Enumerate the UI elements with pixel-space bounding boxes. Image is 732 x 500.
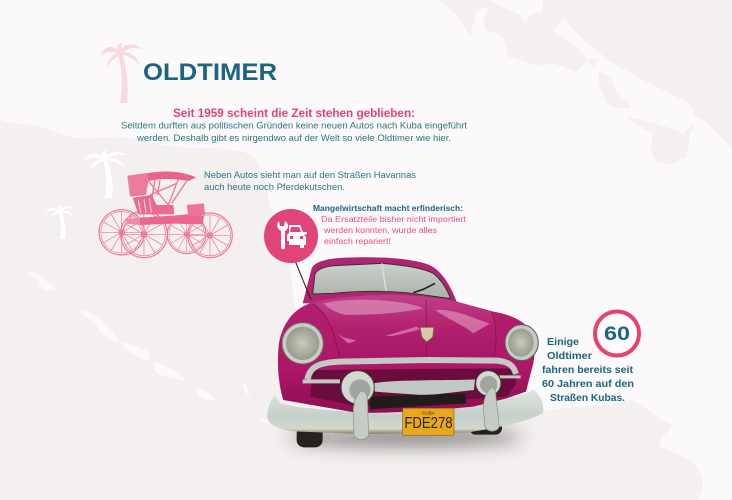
badge: 60 years	[595, 312, 639, 356]
carriage wheels	[99, 210, 232, 258]
hood centre line	[312, 300, 496, 357]
badge: 60 years: 60	[604, 324, 630, 345]
car body	[278, 302, 537, 413]
carriage line 1: Neben Autos sieht man auf den Straßen Havannas	[204, 170, 416, 181]
map: land on the left and bottom	[0, 120, 702, 500]
grille cavity	[310, 368, 517, 407]
emblem	[420, 327, 434, 342]
mainland north east	[542, 0, 732, 148]
licence plate	[403, 408, 454, 435]
mainland west	[439, 0, 598, 72]
island south east	[627, 117, 697, 165]
carriage body and footboard	[140, 214, 204, 225]
repair line 3: einfach repariert!	[324, 236, 391, 246]
icon: pink palm tree behind the title	[100, 42, 142, 103]
licence plate: CUBA	[422, 411, 436, 416]
dark grille slot	[370, 393, 467, 409]
grille upper chrome bar	[307, 360, 516, 379]
intro line 2: werden. Deshalb gibt es nirgendwo auf der Welt so viele Oldtimer wie hier.	[136, 133, 451, 144]
windshield centre bar	[382, 263, 386, 291]
intro heading: Seit 1959 scheint die Zeit stehen geblieben:	[173, 108, 415, 120]
line: fahren bereits seit: fahren bereits seit	[542, 365, 634, 376]
line: 60 Jahren auf den: 60 Jahren auf den	[542, 379, 634, 390]
repair line 2: werden konnten, wurde alles	[323, 225, 437, 235]
title: OLDTIMER	[143, 59, 277, 86]
carriage line 2: auch heute noch Pferdekutschen.	[204, 182, 345, 193]
map: islands	[28, 272, 268, 424]
carriage text	[204, 170, 416, 193]
callout: pointer line from icon to car	[294, 258, 311, 300]
hood highlights	[323, 300, 490, 343]
carriage back panel	[127, 173, 148, 197]
car hood	[312, 295, 496, 357]
60 years text	[542, 337, 634, 404]
grille horizontal bar	[303, 375, 521, 395]
repair line 1: Da Ersatzteile bisher nicht importiert	[321, 214, 467, 224]
windshield	[313, 263, 451, 299]
right headlight	[505, 325, 538, 361]
map: land top right	[439, 0, 732, 165]
canopy struts	[148, 179, 187, 205]
carriage canopy roof	[147, 171, 196, 181]
intro line 1: Seitdem durften aus politischen Gründen keine neuen Autos nach Kuba eingeführt	[121, 120, 467, 132]
line: Straßen Kubas.: Straßen Kubas.	[550, 393, 625, 404]
line: Oldtimer: Oldtimer	[547, 351, 592, 362]
illustration: horse carriage	[99, 171, 232, 258]
wrench glyph	[277, 221, 288, 249]
icon: pink circle with wrench and car	[264, 209, 318, 263]
island centre	[598, 72, 631, 108]
licence plate: FDE278	[404, 415, 453, 432]
line: Einige: Einige	[547, 337, 579, 348]
right overrider	[476, 371, 501, 431]
bumper	[267, 389, 543, 434]
left overrider	[341, 371, 374, 440]
illustration: pink vintage car	[267, 257, 543, 447]
tyres	[297, 420, 502, 447]
car glyph	[287, 225, 307, 248]
wiper	[413, 283, 435, 293]
carriage seat	[133, 195, 174, 214]
icon: white palm tree, large	[83, 150, 128, 198]
left headlight	[282, 323, 323, 364]
icon: white palm tree, small	[45, 205, 76, 239]
car shadow	[287, 428, 523, 446]
car roof	[303, 257, 457, 303]
repair text	[313, 203, 467, 246]
repair heading: Mangelwirtschaft macht erfinderisch:	[313, 203, 463, 213]
intro text block	[121, 108, 467, 144]
